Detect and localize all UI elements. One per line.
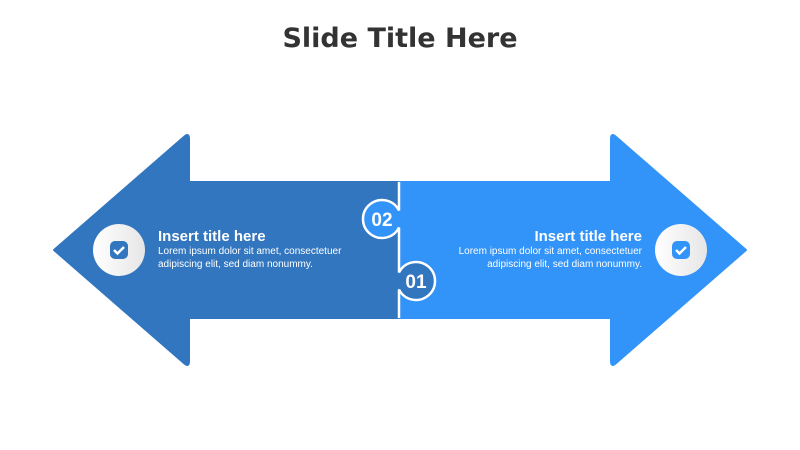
text: left: Insert title here (158, 228, 266, 245)
puzzle knob 01 (397, 262, 435, 300)
arrow: left (54, 135, 399, 365)
text: right: Lorem ipsum dolor sit amet, consectetuer adipiscing elit, sed diam nonummy. (459, 246, 642, 270)
text: right: Insert title here (534, 228, 642, 245)
icon: left check (93, 224, 145, 276)
puzzle knob 02 (363, 200, 401, 238)
text: left (158, 228, 342, 270)
arrow: right (399, 135, 746, 365)
puzzle knob 02: 02 (371, 210, 393, 231)
text: left: Lorem ipsum dolor sit amet, consectetuer adipiscing elit, sed diam nonummy. (158, 246, 341, 270)
title: Slide Title Here (282, 23, 518, 54)
puzzle knob 01: 01 (405, 272, 427, 293)
text: right (459, 228, 642, 270)
icon: right check (655, 224, 707, 276)
